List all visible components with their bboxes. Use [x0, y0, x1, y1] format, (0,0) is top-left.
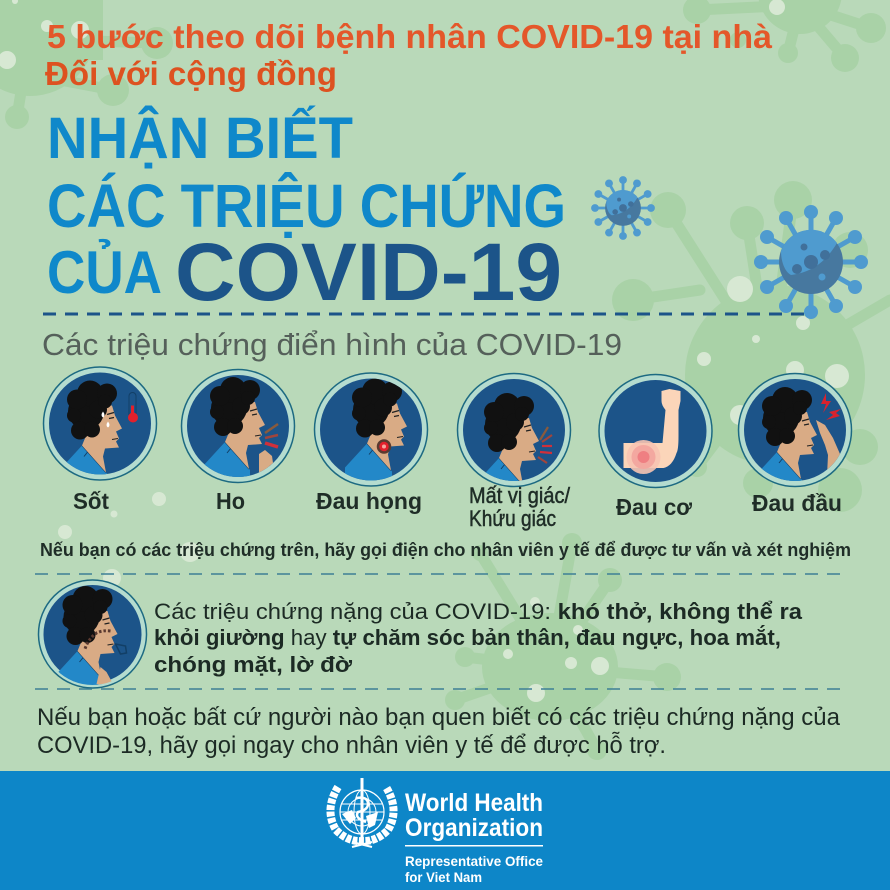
- label: loss of taste and smell: Khứu giác: [469, 506, 556, 531]
- icon: sore throat: [314, 373, 428, 492]
- label: muscle pain: Đau cơ: [616, 494, 693, 520]
- icon: cough: [182, 370, 294, 490]
- heading: recognise: NHẬN BIẾT: [47, 106, 353, 171]
- icon: fever: [44, 367, 156, 494]
- label: sore throat: Đau họng: [316, 488, 422, 514]
- icon: loss of taste and smell: [456, 372, 572, 488]
- logo: WHO emblem: [330, 778, 394, 847]
- label: cough: Ho: [216, 488, 245, 514]
- call for help text: COVID-19, hãy gọi ngay cho nhân viên y tế để được hỗ trợ.: [37, 732, 666, 759]
- severe symptoms text: [154, 599, 803, 677]
- footer band: [0, 771, 890, 890]
- advice line: Nếu bạn có các triệu chứng trên, hãy gọi điện cho nhân viên y tế để được tư vấn và xét nghiệm: [40, 540, 851, 560]
- icon: muscle pain: [599, 374, 712, 488]
- icon: large virus: [754, 205, 868, 319]
- label: headache: Đau đầu: [752, 490, 842, 516]
- logo: organisation name: World Health: [405, 789, 543, 817]
- heading: symptoms: CÁC TRIỆU CHỨNG: [47, 172, 566, 240]
- severe symptoms text: khỏi giường hay tự chăm sóc bản thân, đau ngực, hoa mắt,: [154, 625, 781, 650]
- label: fever: Sốt: [73, 488, 109, 514]
- logo: organisation name: [405, 789, 543, 885]
- heading: COVID-19: COVID-19: [175, 227, 562, 318]
- label: loss of taste and smell: [469, 483, 571, 531]
- logo: organisation name: for Viet Nam: [405, 869, 482, 885]
- logo: organisation name: Representative Office: [405, 853, 543, 869]
- heading: of: CỦA: [47, 239, 162, 306]
- subtitle: community: Đối với cộng đồng: [45, 55, 337, 92]
- icon: small virus: [591, 176, 655, 240]
- label: loss of taste and smell: Mất vị giác/: [469, 483, 571, 508]
- icon: headache: [738, 374, 852, 500]
- severe symptoms text: Các triệu chứng nặng của COVID-19: khó thở, không thể ra: [154, 599, 803, 624]
- logo: organisation name: Organization: [405, 814, 543, 842]
- icon: severe symptoms: [38, 580, 146, 699]
- title: programme line: 5 bước theo dõi bệnh nhân COVID-19 tại nhà: [47, 18, 773, 55]
- section heading: typical symptoms: Các triệu chứng điển hình của COVID-19: [42, 327, 622, 362]
- background bubbles: [0, 0, 849, 702]
- call for help text: Nếu bạn hoặc bất cứ người nào bạn quen biết có các triệu chứng nặng của: [37, 704, 841, 731]
- call for help text: [37, 704, 841, 759]
- severe symptoms text: chóng mặt, lờ đờ: [154, 652, 352, 677]
